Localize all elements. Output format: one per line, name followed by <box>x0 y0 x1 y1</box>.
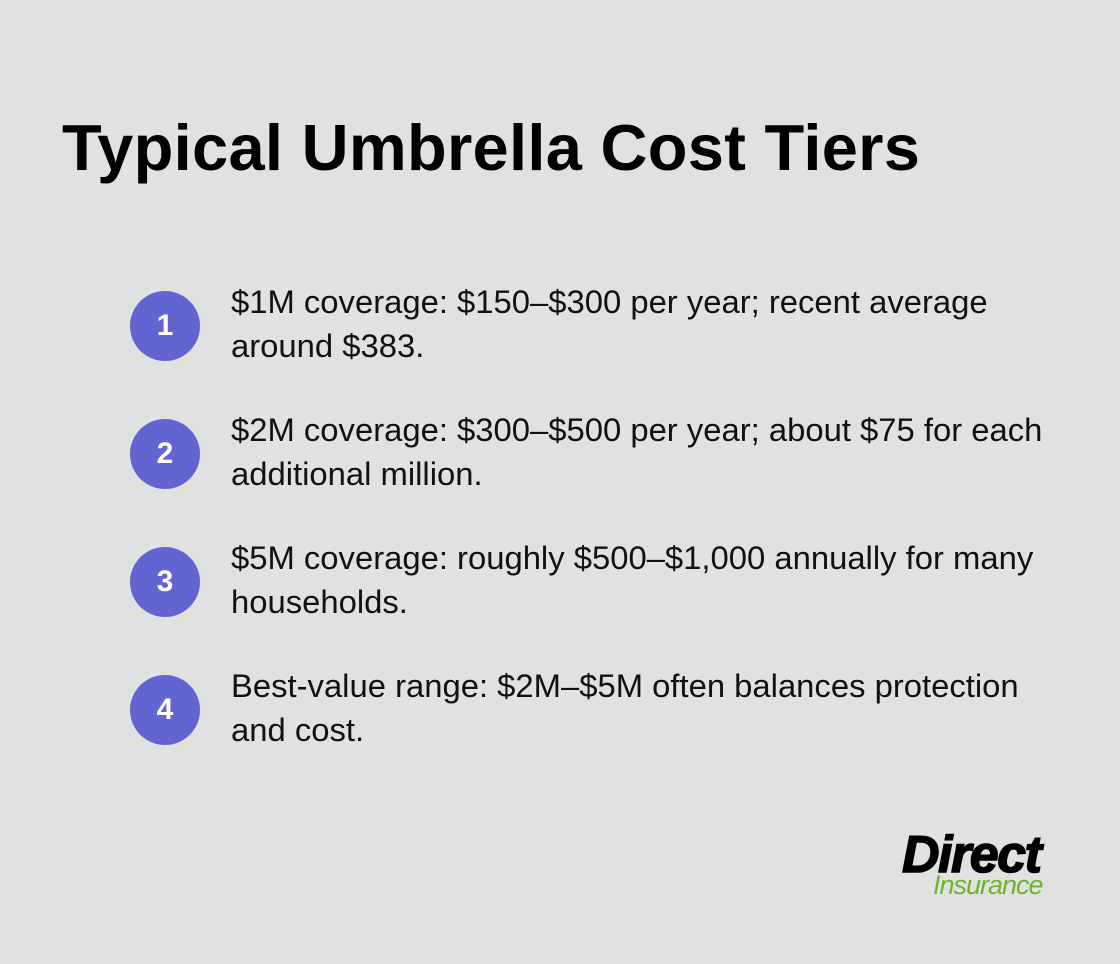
item 2 <box>130 411 1042 492</box>
text 3: households. <box>231 583 408 620</box>
item 4 <box>130 667 1019 748</box>
item 3 <box>130 539 1034 620</box>
text 3 <box>231 539 1034 620</box>
text 4: and cost. <box>231 711 364 748</box>
text 3: $5M coverage: roughly $500–$1,000 annually for many <box>231 539 1033 576</box>
text 4: Best-value range: $2M–$5M often balances protection <box>231 667 1019 704</box>
text 4 <box>231 667 1019 748</box>
text 1: around $383. <box>231 327 424 364</box>
text 2: $2M coverage: $300–$500 per year; about $75 for each <box>231 411 1042 448</box>
badge 2 <box>130 419 200 489</box>
text 2: additional million. <box>231 455 483 492</box>
title: Typical Umbrella Cost Tiers <box>62 111 920 184</box>
badge 4 <box>130 675 200 745</box>
text 1 <box>231 283 988 364</box>
badge 3: 3 <box>157 565 173 598</box>
badge 3 <box>130 547 200 617</box>
text 1: $1M coverage: $150–$300 per year; recent average <box>231 283 988 320</box>
item 1 <box>130 283 988 364</box>
badge 1: 1 <box>157 309 173 342</box>
logo: Insurance <box>933 870 1043 900</box>
badge 4: 4 <box>157 693 173 726</box>
badge 2: 2 <box>157 437 173 470</box>
text 2 <box>231 411 1042 492</box>
badge 1 <box>130 291 200 361</box>
logo: Direct <box>902 826 1040 884</box>
